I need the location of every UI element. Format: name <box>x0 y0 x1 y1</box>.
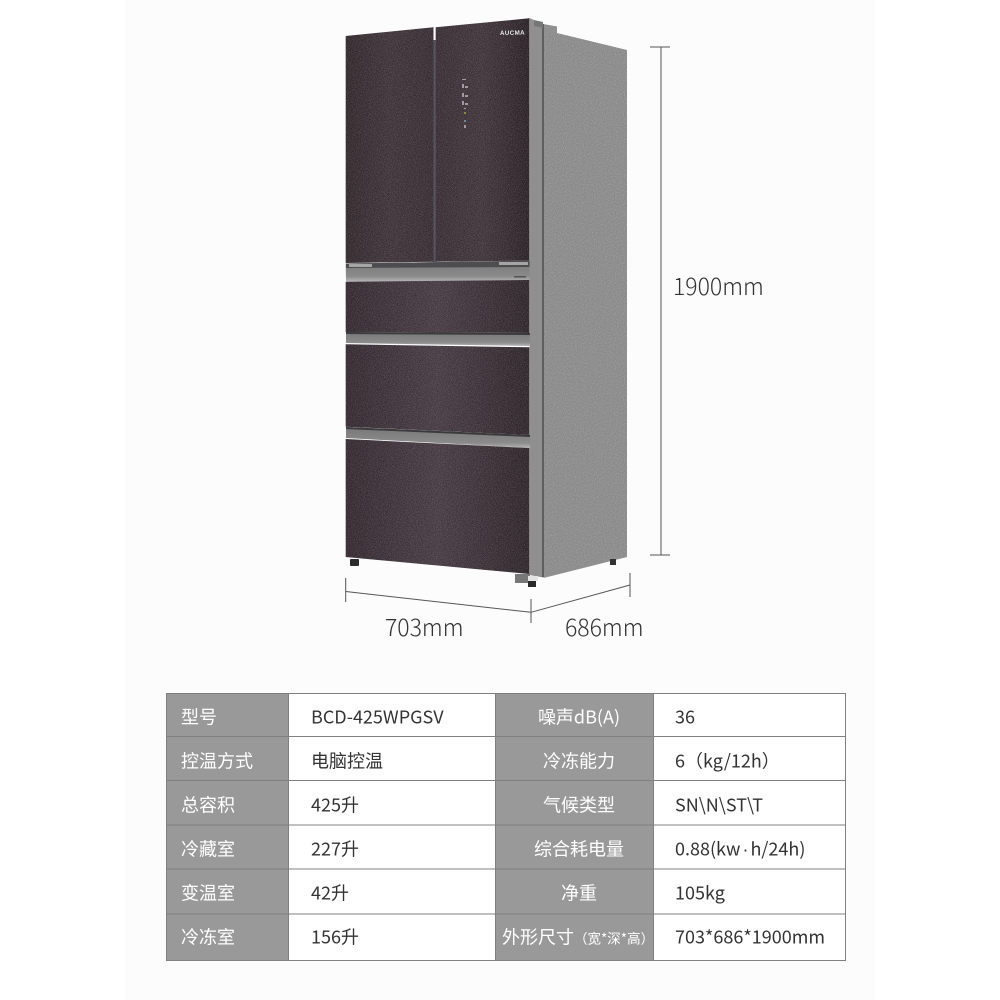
left values: 227升 <box>311 836 359 862</box>
header column right <box>495 694 654 960</box>
left values <box>311 704 444 950</box>
right labels: 外形尺寸（宽*深*高） <box>502 924 654 950</box>
left labels: 总容积 <box>181 792 235 818</box>
width and depth dimension lines <box>346 573 630 623</box>
bottom drawer front <box>346 439 529 574</box>
height dimension line <box>650 47 670 555</box>
height label: 1900mm <box>673 268 764 302</box>
door gap <box>432 40 436 262</box>
left labels: 变温室 <box>181 880 235 906</box>
table background <box>166 694 846 960</box>
right values: SN\N\ST\T <box>675 792 763 818</box>
header column left <box>166 694 288 960</box>
left labels: 型号 <box>181 704 217 730</box>
right labels: 综合耗电量 <box>534 836 624 862</box>
left labels <box>181 704 253 950</box>
top left door <box>346 27 434 263</box>
brand logo: AUCMA <box>500 30 525 37</box>
right values: 703*686*1900mm <box>675 924 825 950</box>
specification table <box>166 693 846 961</box>
left labels: 冷冻室 <box>181 924 235 950</box>
left values: 42升 <box>311 880 349 906</box>
background panel <box>125 0 875 1000</box>
left values: 425升 <box>311 792 359 818</box>
top right door <box>436 18 529 262</box>
right side panel <box>543 24 627 578</box>
right values: 105kg <box>675 880 725 906</box>
refrigerator <box>346 18 627 587</box>
left values: BCD-425WPGSV <box>311 704 444 730</box>
right values <box>675 704 825 950</box>
door display panel <box>462 79 468 128</box>
front right foot <box>515 574 538 587</box>
rear feet <box>610 559 616 565</box>
right labels: 气候类型 <box>543 792 615 818</box>
right values: 6（kg/12h） <box>675 748 780 774</box>
top drawer front <box>346 280 529 333</box>
third handle band <box>346 427 530 448</box>
depth label: 686mm <box>565 609 644 643</box>
width label: 703mm <box>385 609 464 643</box>
table grid <box>166 693 846 961</box>
right values: 36 <box>675 704 695 730</box>
right labels: 冷冻能力 <box>543 748 615 774</box>
left feet <box>350 559 359 566</box>
right labels: 噪声dB(A) <box>538 704 620 730</box>
strip shadow line <box>542 24 544 577</box>
left values: 电脑控温 <box>311 748 383 774</box>
second handle band <box>346 332 530 346</box>
hinge <box>534 20 543 28</box>
left labels: 冷藏室 <box>181 836 235 862</box>
front side strip <box>530 18 543 578</box>
top drawer handle band <box>346 261 530 282</box>
right values: 0.88(kw·h/24h) <box>675 836 805 862</box>
middle drawer front <box>346 344 529 435</box>
left values: 156升 <box>311 924 359 950</box>
left labels: 控温方式 <box>181 748 253 774</box>
right labels: 净重 <box>561 880 597 906</box>
right labels <box>502 704 654 950</box>
